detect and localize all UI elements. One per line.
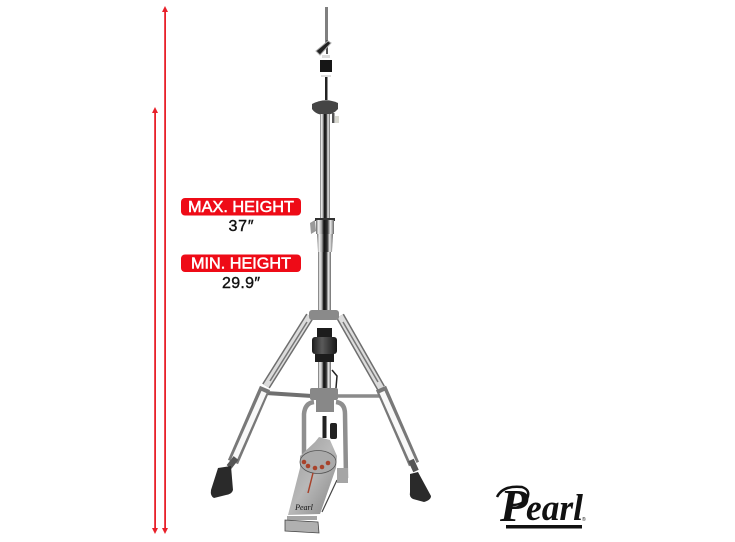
lower tube: [318, 252, 331, 312]
cymbal seat: [312, 100, 339, 123]
height clamp: [310, 218, 335, 252]
chain: [322, 416, 326, 438]
top rod and clutch: [316, 7, 332, 100]
upper tube: [320, 114, 330, 220]
footboard: Pearl: [294, 503, 314, 512]
arrow: minimum height: [152, 107, 158, 534]
right brace: [337, 394, 382, 398]
right lower leg: [381, 388, 416, 471]
Pearl logo: [497, 480, 586, 531]
label: min height: MIN. HEIGHT: [191, 256, 292, 272]
hi-hat stand: [211, 7, 431, 533]
top leg bracket: [309, 310, 339, 320]
value: min height: 29.9″: [222, 275, 260, 292]
pedal frame: [304, 402, 346, 478]
footboard: [288, 437, 337, 515]
Pearl logo: P: [499, 480, 529, 531]
right frame foot: [337, 468, 348, 483]
hose cable: [332, 370, 337, 388]
left upper leg: [266, 316, 310, 386]
left brace: [266, 393, 312, 396]
Pearl logo: earl: [526, 488, 584, 529]
lower centre tube: [318, 362, 331, 389]
pedal hub: [316, 400, 334, 412]
height lock collar: [312, 328, 337, 362]
arrow: maximum height: [162, 6, 168, 534]
value: max height: 37″: [228, 218, 254, 235]
cam: [330, 423, 337, 439]
right upper leg: [340, 316, 381, 388]
Pearl logo: ®: [582, 516, 586, 523]
left lower leg: [229, 388, 265, 467]
left rubber foot: [211, 466, 233, 498]
heel plate: [285, 516, 319, 533]
right rubber foot: [410, 472, 431, 502]
side link: [322, 480, 337, 512]
base bracket: [310, 388, 338, 400]
label: max height: MAX. HEIGHT: [188, 199, 295, 216]
